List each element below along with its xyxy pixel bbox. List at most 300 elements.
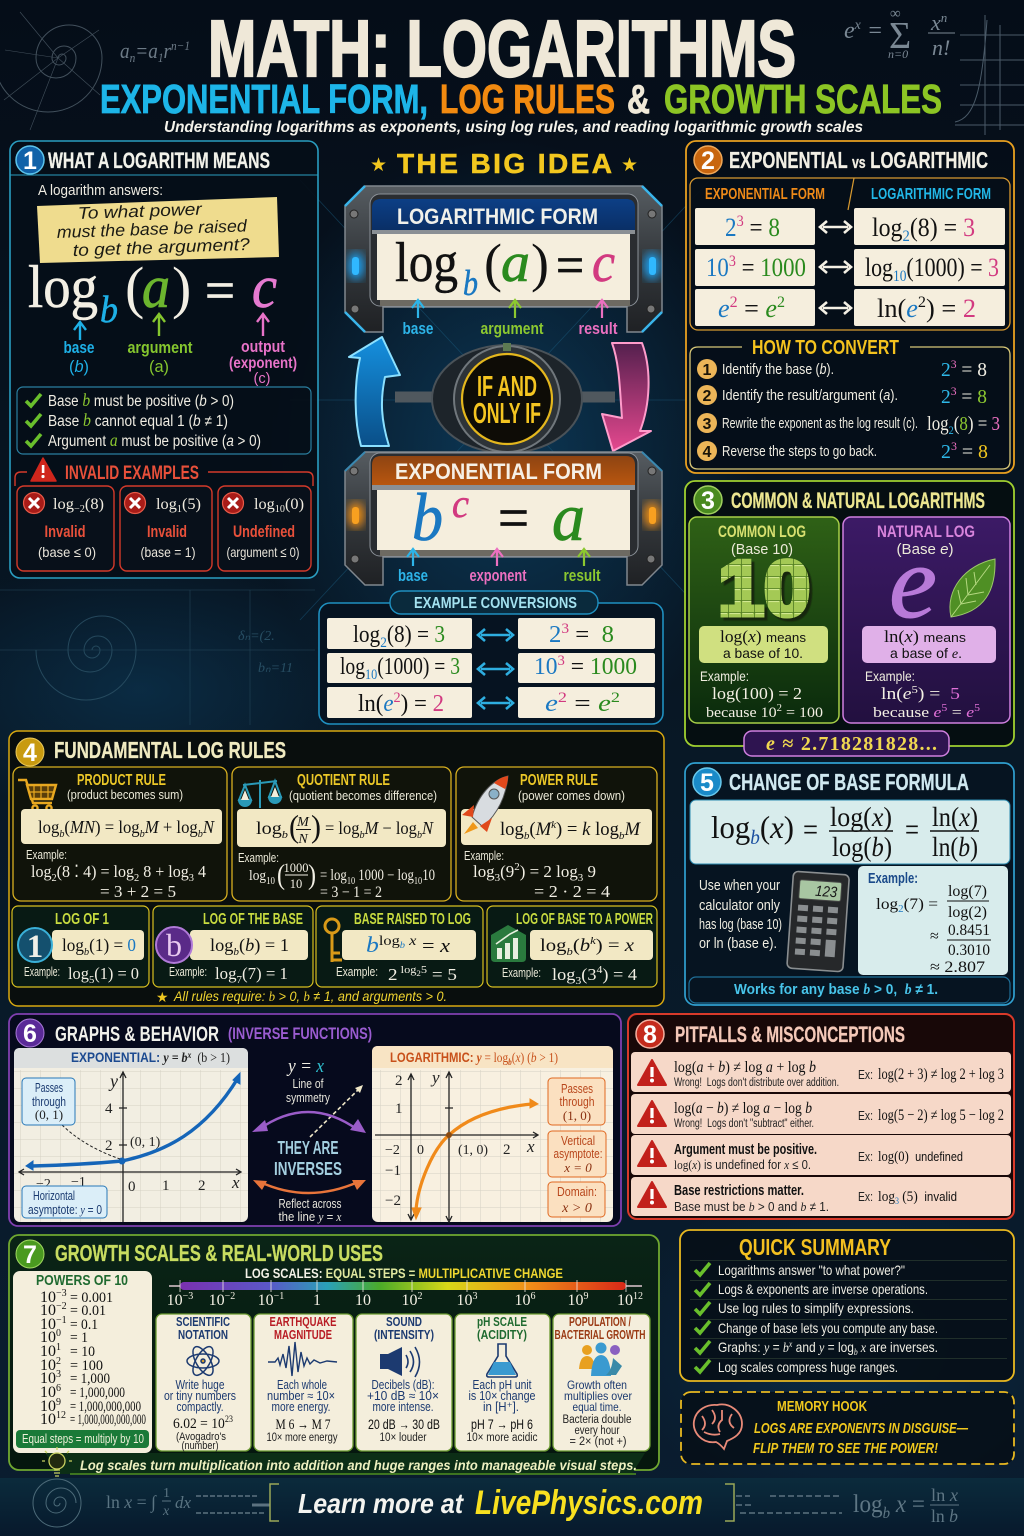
power rule card: 9 <box>583 862 596 881</box>
exponential graph card: 1 <box>162 1178 170 1194</box>
validity conditions: Base b cannot equal 1 (b ≠ 1) <box>48 410 228 430</box>
invalid example: zero argument: log <box>254 496 274 513</box>
badge 4: 4 <box>23 739 37 767</box>
rainbow log scale: 6 <box>530 1291 536 1302</box>
base raised to log card: = x <box>421 936 449 957</box>
product rule card: b <box>198 828 203 840</box>
card: scientific notation: (number) <box>182 1440 218 1452</box>
pitfall: sum <box>631 1052 1011 1092</box>
summary list: Graphs: y = b <box>718 1339 790 1356</box>
log of 1 card: 0 <box>127 935 136 955</box>
takeaway banner: Log scales turn multiplication into addition and huge ranges into manageable visual steps. <box>80 1457 637 1473</box>
usage text: calculator only <box>699 897 780 914</box>
form comparison table: 1000 <box>760 253 806 282</box>
rules footnote: All rules require: b > 0, b ≠ 1, and arguments > 0. <box>173 988 447 1005</box>
validity conditions <box>17 387 311 454</box>
footer formula left: x <box>162 1504 170 1519</box>
log of base to a power card: (3 <box>581 965 596 984</box>
quotient rule card: 10 <box>422 867 435 884</box>
quotient rule card: N <box>297 832 308 847</box>
conversion rows: log <box>340 654 371 680</box>
natural log card: 5 <box>950 684 960 703</box>
conversion rows: 8 <box>602 622 614 648</box>
how to convert: HOW TO CONVERT <box>752 337 899 359</box>
quick summary title: QUICK SUMMARY <box>739 1234 891 1260</box>
power rule card: POWER RULE <box>520 772 598 789</box>
how to convert: 3 <box>951 384 957 398</box>
log of the base card: 7 <box>237 974 242 986</box>
rules footnote: ★ <box>156 989 169 1005</box>
quotient rule card: 1000 <box>284 861 308 875</box>
invalid example: zero argument <box>218 486 311 571</box>
badge 1 <box>16 146 44 175</box>
how to convert: 8 <box>977 386 987 408</box>
icon: shopping cart <box>18 780 56 811</box>
logarithmic axes <box>375 1072 538 1222</box>
powers of 10 table: = 1,000,000,000 <box>70 1399 141 1415</box>
logarithmic form formula: ) <box>531 233 549 293</box>
formula: geometric sequence: 1 <box>158 50 164 65</box>
footer bracket left <box>270 1484 279 1521</box>
rainbow log scale: 1 <box>313 1292 321 1309</box>
annotation: output: (c) <box>254 370 270 387</box>
pitfall: difference: Wrong! Logs don't "subtract" either. <box>674 1118 814 1130</box>
log of base to a power card: (b <box>573 935 589 955</box>
summary list: b <box>854 1347 858 1357</box>
labels under logarithmic form: result <box>578 319 618 338</box>
summary list: x <box>858 1341 867 1356</box>
footer <box>0 1478 1024 1536</box>
powers of 10 table: = 0.01 <box>70 1303 106 1319</box>
form comparison table: (1000) = <box>906 253 988 282</box>
logarithmic graph card: x <box>526 1137 535 1156</box>
logarithmic curve <box>412 1099 538 1219</box>
log of the base card <box>153 906 313 987</box>
exponential graph card: 4 <box>105 1101 113 1117</box>
quotient rule card: ) <box>311 808 321 844</box>
works for any base note: Works for any base b > 0, b ≠ 1. <box>734 981 938 998</box>
card: population growth: POPULATION / <box>569 1315 631 1329</box>
usage text: or ln (base e). <box>699 935 777 952</box>
log of base to a power card: b <box>567 946 573 958</box>
exponential form formula: = <box>498 485 529 551</box>
quotient rule card: 10 <box>347 876 355 887</box>
product rule card: PRODUCT RULE <box>77 772 166 789</box>
big idea title: ★ <box>370 155 387 176</box>
form comparison table: log <box>865 253 898 282</box>
form comparison table: EXPONENTIAL FORM <box>705 186 825 203</box>
background math decoration: top left spiral and series formula <box>0 12 102 130</box>
heading: GROWTH SCALES & REAL-WORLD USES <box>55 1240 383 1266</box>
main formula: ln(x) <box>932 802 978 832</box>
product rule card: 8 + log <box>139 862 189 881</box>
how to convert: ( <box>954 413 960 435</box>
labels under exponential form: exponent <box>470 566 527 585</box>
main formula <box>28 254 277 331</box>
formula: geometric sequence: n−1 <box>171 38 190 53</box>
card: scientific notation: Write huge <box>176 1378 225 1392</box>
main formula: b <box>750 827 760 849</box>
logarithmic graph card: y <box>430 1068 440 1087</box>
card: pH scale: 10× more acidic <box>466 1432 538 1444</box>
how to convert: 4 <box>703 444 712 461</box>
powers of 10 table: 1 <box>56 1342 61 1353</box>
power rule card: 2 <box>514 861 520 873</box>
log of 1 card: b <box>84 946 90 958</box>
log of base to a power card <box>487 906 657 987</box>
power rule card: ) = 2 log <box>520 862 578 881</box>
product rule card: Example: <box>26 847 67 862</box>
card: scientific notation: SCIENTIFIC <box>176 1314 230 1329</box>
powers of 10 table: = 0.001 <box>70 1290 113 1306</box>
exponential form frame <box>345 452 662 585</box>
main formula: log(x) <box>830 802 892 832</box>
rainbow log scale: 10 <box>167 1292 183 1309</box>
arrow: logarithmic to exponential <box>602 343 651 451</box>
panel: memory hook <box>681 1392 1014 1464</box>
how to convert: Identify the base (b). <box>722 362 834 378</box>
panel: the big idea <box>345 148 662 585</box>
panel 5: change of base formula <box>685 763 1014 1005</box>
form comparison table: = <box>744 213 768 242</box>
powers of 10 table: −1 <box>56 1315 67 1326</box>
quotient rule card: N <box>421 818 434 838</box>
worked example: (7) = <box>904 896 938 913</box>
base raised to log card: 5 <box>421 964 428 976</box>
yellow question note: to get the argument? <box>72 235 251 260</box>
log callouts: (1, 0) <box>563 1108 591 1123</box>
panel 8: pitfalls and misconceptions <box>628 1014 1014 1219</box>
card: scientific notation: compactly. <box>176 1400 224 1414</box>
log of 1 card: (1) = <box>89 935 127 956</box>
base raised to log card: = 5 <box>427 965 457 984</box>
card: population growth <box>553 1314 650 1451</box>
powers of 10 table: 10 <box>40 1302 56 1319</box>
invalid example: zero argument: (0) <box>285 496 304 513</box>
value of e pill: e ≈ 2.718281828... <box>766 733 937 755</box>
card: scientific notation: 6.02 = 10 <box>173 1416 230 1432</box>
natural log card: a base of e. <box>890 645 962 662</box>
powers of 10 table: POWERS OF 10 <box>36 1272 128 1289</box>
exponential form header <box>372 456 635 556</box>
badge 6 <box>16 1019 44 1048</box>
invalid example: negative base: Invalid <box>44 522 86 541</box>
natural log card: ) = <box>918 684 950 703</box>
worked example: log(2) <box>948 904 987 921</box>
main formula: ) <box>172 255 191 320</box>
invalid examples heading <box>15 458 313 486</box>
pitfall: base restrictions: 3 <box>895 1196 899 1206</box>
pitfall: positive argument: Argument must be positive. <box>674 1141 817 1158</box>
how to convert: = 8 <box>957 359 987 381</box>
footer bracket right <box>725 1484 734 1521</box>
main formula: log <box>711 809 752 845</box>
annotation: output <box>229 314 297 387</box>
exponential form formula: c <box>452 481 469 526</box>
common log card: 10 <box>718 544 810 632</box>
pitfall: base restrictions: invalid <box>924 1189 957 1204</box>
callout: passes through (0,1) <box>22 1078 120 1159</box>
conversion rows: = <box>569 622 602 648</box>
common log card: (Base 10) <box>731 541 793 558</box>
main formula: log <box>28 254 98 320</box>
form comparison table: log <box>872 213 905 242</box>
rainbow log scale: −3 <box>183 1291 193 1302</box>
worked example: 0.3010 <box>948 942 990 959</box>
quotient rule card <box>232 767 451 901</box>
powers of 10 table: 6 <box>56 1383 61 1394</box>
how to convert: Identify the result/argument (a). <box>722 388 898 404</box>
log of 1 card: log <box>62 935 85 955</box>
icon: rocket <box>462 776 508 834</box>
form comparison table: e <box>718 294 730 323</box>
rainbow log scale: 10 <box>456 1292 472 1309</box>
icon: leaf <box>950 559 995 617</box>
summary list: Change of base lets you compute any base. <box>718 1320 938 1336</box>
logarithmic form formula: log <box>395 232 458 294</box>
log callouts: x > 0 <box>561 1201 592 1216</box>
quotient rule card: QUOTIENT RULE <box>297 772 390 789</box>
log callouts <box>548 1078 606 1217</box>
conversion rows: e <box>545 691 558 717</box>
base raised to log card: b <box>366 932 379 957</box>
powers of 10 table: = 1,000,000 <box>70 1385 125 1401</box>
card: scientific notation: NOTATION <box>178 1327 228 1342</box>
badge 1: 1 <box>23 147 37 175</box>
quotient rule card: ) <box>308 860 316 891</box>
exponential graph card: −2 <box>36 1177 51 1192</box>
heading: FUNDAMENTAL LOG RULES <box>54 737 286 763</box>
power rule card: = 2 · 2 = 4 <box>534 882 611 901</box>
exponential curve <box>26 1073 240 1170</box>
powers of 10 table: 3 <box>56 1369 61 1380</box>
invalid example: negative base: (8) <box>85 496 104 513</box>
main formula: = <box>205 260 235 322</box>
main formula: a <box>142 254 170 320</box>
footer formula right: b <box>883 1505 890 1522</box>
powers of 10 table: 10 <box>40 1316 56 1333</box>
they are inverses <box>252 1056 366 1224</box>
summary list: are inverses. <box>870 1339 950 1355</box>
they are inverses: symmetry <box>286 1090 330 1105</box>
base raised to log card: b <box>400 940 406 950</box>
quotient rule card: M <box>364 818 379 838</box>
conversion rows: ) = <box>401 691 433 717</box>
main formula: log(b) <box>832 832 892 862</box>
badge 7: 7 <box>23 1241 37 1269</box>
summary list: Logs & exponents are inverse operations. <box>718 1281 928 1297</box>
formula: geometric sequence: a <box>120 38 131 63</box>
common log card: Example: <box>700 668 749 684</box>
power rule card: (power comes down) <box>518 788 625 803</box>
how to convert: Reverse the steps to go back. <box>722 444 877 460</box>
product rule card: M <box>144 817 160 837</box>
example conversions pill <box>390 591 598 614</box>
form comparison table: 2 <box>725 213 737 242</box>
how to convert: 3 <box>703 416 712 433</box>
subtitle <box>100 76 942 122</box>
powers of 10 table: 0 <box>56 1328 61 1339</box>
log of base to a power card: ) = 4 <box>602 965 638 984</box>
powers of 10 table: 10 <box>40 1411 56 1428</box>
panel 4: fundamental log rules <box>9 731 664 1006</box>
card: earthquake magnitude: 10× more energy <box>266 1432 338 1444</box>
quotient rule card: b <box>282 829 289 841</box>
logarithmic graph card: 2 <box>395 1073 402 1089</box>
conversion rows: 10 <box>534 654 558 680</box>
invalid example: base one: Invalid <box>147 522 187 541</box>
icon: atom <box>187 1344 219 1378</box>
memory hook text: MEMORY HOOK <box>777 1399 867 1415</box>
badge 3 <box>694 486 722 515</box>
usage text: Use when your <box>699 877 780 894</box>
footer formula right: log <box>853 1491 885 1518</box>
formula: geometric sequence: n <box>130 50 135 65</box>
card: earthquake magnitude: Each whole <box>277 1378 327 1392</box>
exponential graph card: x <box>187 1050 192 1060</box>
subtitle: GROWTH SCALES <box>664 76 942 122</box>
power rule card: k <box>551 819 557 831</box>
form comparison table: 10 <box>706 253 729 282</box>
card: sound intensity: 20 dB → 30 dB <box>368 1417 440 1432</box>
how to convert: 2 <box>941 386 951 408</box>
powers of 10 table: Equal steps = multiply by 10 <box>22 1431 144 1446</box>
common log card: 2 <box>777 703 782 714</box>
heading: GRAPHS & BEHAVIOR <box>55 1023 219 1046</box>
pitfall: base restrictions: log <box>878 1189 897 1205</box>
logarithmic graph card: (x) (b > 1) <box>512 1051 563 1066</box>
product rule card: (8 ⁚ 4) = log <box>57 862 135 881</box>
product rule card: 3 <box>189 872 194 884</box>
icon: b coin <box>156 927 192 963</box>
conversion rows: 2 <box>380 635 387 651</box>
rainbow log scale <box>167 1280 643 1309</box>
exponential graph card: (b > 1) <box>191 1051 230 1066</box>
invalid example: negative base: (base ≤ 0) <box>38 544 96 560</box>
validity conditions: Base b must be positive (b > 0) <box>48 390 234 410</box>
worked example: log(7) <box>948 883 987 900</box>
labels under logarithmic form <box>402 300 618 338</box>
formula: exponential series: x <box>854 18 862 33</box>
how to convert: = <box>957 441 978 463</box>
form comparison table: ) = <box>926 294 963 323</box>
log callouts: Passes <box>561 1081 593 1096</box>
yellow question note: must the base be raised <box>56 216 248 242</box>
pitfall: difference: Ex: <box>858 1108 873 1123</box>
summary list: Logarithms answer "to what power?" <box>718 1262 905 1278</box>
summary list: x <box>788 1339 792 1349</box>
card: sound intensity: SOUND <box>386 1314 422 1329</box>
labels under exponential form <box>398 549 601 585</box>
log of the base card: Example: <box>169 965 207 979</box>
card: earthquake magnitude: M 6 → M 7 <box>276 1417 331 1433</box>
main formula: c <box>252 254 277 320</box>
power rule card: (M <box>529 820 551 840</box>
common log card: = 100 <box>782 705 823 721</box>
logarithmic form formula: a <box>501 232 530 294</box>
powers of 10 table: 2 <box>56 1356 61 1367</box>
formula: exponential series: x <box>931 10 941 35</box>
card: pH scale: pH 7 → pH 6 <box>471 1416 533 1432</box>
formula: geometric sequence: r <box>164 38 171 63</box>
logarithmic form formula: = <box>556 235 584 295</box>
powers of 10 table <box>13 1271 152 1453</box>
power rule card: b <box>619 830 625 842</box>
icon: brain <box>694 1404 742 1449</box>
how to convert: 3 <box>951 357 957 371</box>
invalid example: zero argument: Undefined <box>233 522 295 541</box>
rainbow log scale: 10 <box>514 1292 530 1309</box>
natural log card: 5 <box>912 684 918 696</box>
badge 5 <box>693 768 721 797</box>
formula: exponential series: ∞ <box>890 6 901 22</box>
exponential graph card: −1 <box>71 1175 86 1190</box>
footer decorative rules <box>196 1496 842 1513</box>
rainbow log scale: 10 <box>258 1292 274 1309</box>
annotation: argument <box>128 314 193 376</box>
conversion rows: 10 <box>365 667 377 683</box>
card: population growth: Growth often <box>567 1378 627 1392</box>
rainbow log scale: 10 <box>617 1292 633 1309</box>
card: earthquake magnitude: more energy. <box>272 1400 330 1414</box>
invalid example: base one: (base = 1) <box>140 544 196 560</box>
product rule card: N <box>202 817 215 837</box>
how to convert: log <box>927 413 953 435</box>
exponential form formula: a <box>552 479 585 555</box>
log of the base card: log <box>210 935 233 955</box>
form comparison table: 2 <box>730 294 738 311</box>
card: pH scale: (ACIDITY) <box>477 1327 527 1342</box>
they are inverses: INVERSES <box>274 1159 342 1179</box>
main formula: = <box>803 811 818 847</box>
card: sound intensity: Decibels (dB): <box>372 1378 434 1392</box>
annotation: base: (b) <box>69 357 89 376</box>
form comparison table: 3 <box>963 213 975 242</box>
logarithmic graph card <box>372 1046 613 1222</box>
if and only if medallion: IF AND <box>477 371 537 403</box>
logarithmic graph card: −1 <box>385 1163 401 1179</box>
how to convert: 1 <box>703 362 712 379</box>
pitfall: base restrictions <box>631 1177 1011 1216</box>
log of 1 card: log <box>68 964 90 983</box>
main formula: (x) <box>760 809 794 845</box>
natural log card: NATURAL LOG <box>877 522 975 541</box>
log of base to a power card: 4 <box>596 964 603 976</box>
base raised to log card: 2 <box>416 969 421 978</box>
worked example: log <box>876 896 896 913</box>
exponential graph card: y <box>108 1071 118 1091</box>
formula: exponential series: n! <box>932 35 950 60</box>
form comparison table: = <box>736 253 760 282</box>
invalid example: negative base: −2 <box>74 504 85 515</box>
footer decoration: spiral <box>33 1479 81 1527</box>
formula: geometric sequence: =a <box>135 38 158 63</box>
rainbow log scale: 10 <box>402 1292 418 1309</box>
card: sound intensity <box>356 1314 452 1451</box>
footer formula left <box>106 1486 192 1519</box>
rainbow log scale: 10 <box>209 1292 225 1309</box>
icon: growth chart <box>491 925 526 962</box>
card: population growth: Bacteria double <box>562 1414 632 1426</box>
conversion rows: 2 <box>549 622 561 648</box>
card: sound intensity: more intense. <box>372 1400 434 1414</box>
how to convert: 2 <box>941 359 951 381</box>
they are inverses: Reflect across <box>278 1196 342 1211</box>
annotation: base <box>64 322 94 376</box>
background decoration: mid left spiral: δₙ=(2. <box>238 629 275 644</box>
conversion rows <box>327 618 655 718</box>
logarithmic graph card: LOGARITHMIC: y = log <box>390 1049 514 1066</box>
